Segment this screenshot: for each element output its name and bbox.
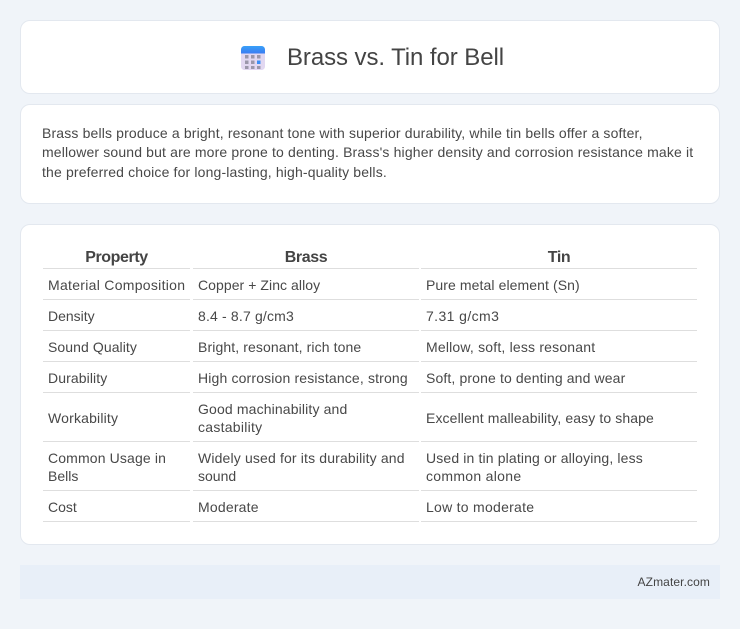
summary text: mellower sound but are more prone to denting. Brass's higher density and corrosion resistance make it (42, 144, 693, 160)
comparison table (43, 249, 697, 522)
row: sound quality: Bright, resonant, rich tone (198, 339, 361, 355)
row: density (48, 308, 499, 324)
row: common usage in bells: Bells (48, 468, 78, 484)
summary text: Brass bells produce a bright, resonant tone with superior durability, while tin bells offer a softer, (42, 124, 643, 140)
table header: Property (85, 249, 148, 266)
panel: title card (20, 20, 720, 94)
footer credit: AZmater.com (638, 575, 710, 589)
row: cost: Cost (48, 499, 77, 515)
row: cost (48, 499, 534, 515)
row: workability: Workability (48, 410, 118, 426)
summary text: the preferred choice for long-lasting, high-quality bells. (42, 164, 387, 180)
title: Brass vs. Tin for Bell (287, 44, 504, 71)
row: material composition: Material Composition (48, 277, 185, 293)
row: density: 8.4 - 8.7 g/cm3 (198, 308, 294, 324)
row: common usage in bells (48, 450, 643, 484)
row: cost: Moderate (198, 499, 259, 515)
row: common usage in bells: common alone (426, 468, 521, 484)
table header (85, 249, 570, 266)
row: durability (48, 370, 626, 386)
row: density: Density (48, 308, 95, 324)
row: sound quality: Sound Quality (48, 339, 137, 355)
panel: comparison table (20, 224, 720, 545)
row: common usage in bells: Used in tin plating or alloying, less (426, 450, 643, 466)
row: sound quality: Mellow, soft, less resonant (426, 339, 595, 355)
row: common usage in bells: sound (198, 468, 236, 484)
panel: summary (20, 104, 720, 204)
row: common usage in bells: Widely used for its durability and (198, 450, 405, 466)
row: workability: Excellent malleability, easy to shape (426, 410, 654, 426)
row: workability (48, 401, 654, 435)
row: durability: Soft, prone to denting and wear (426, 370, 625, 386)
row: durability: High corrosion resistance, strong (198, 370, 408, 386)
table header: Tin (548, 249, 570, 266)
row: cost: Low to moderate (426, 499, 534, 515)
footer bar (20, 565, 720, 599)
icon: calendar (241, 46, 265, 70)
row: sound quality (48, 339, 596, 355)
summary text (42, 124, 694, 180)
row: material composition: Copper + Zinc alloy (198, 277, 320, 293)
row: workability: castability (198, 419, 262, 435)
row: density: 7.31 g/cm3 (426, 308, 499, 324)
row: workability: Good machinability and (198, 401, 347, 417)
row: material composition: Pure metal element (Sn) (426, 277, 580, 293)
row: material composition (48, 277, 580, 293)
table header: Brass (285, 249, 327, 266)
row: durability: Durability (48, 370, 107, 386)
row: common usage in bells: Common Usage in (48, 450, 166, 466)
